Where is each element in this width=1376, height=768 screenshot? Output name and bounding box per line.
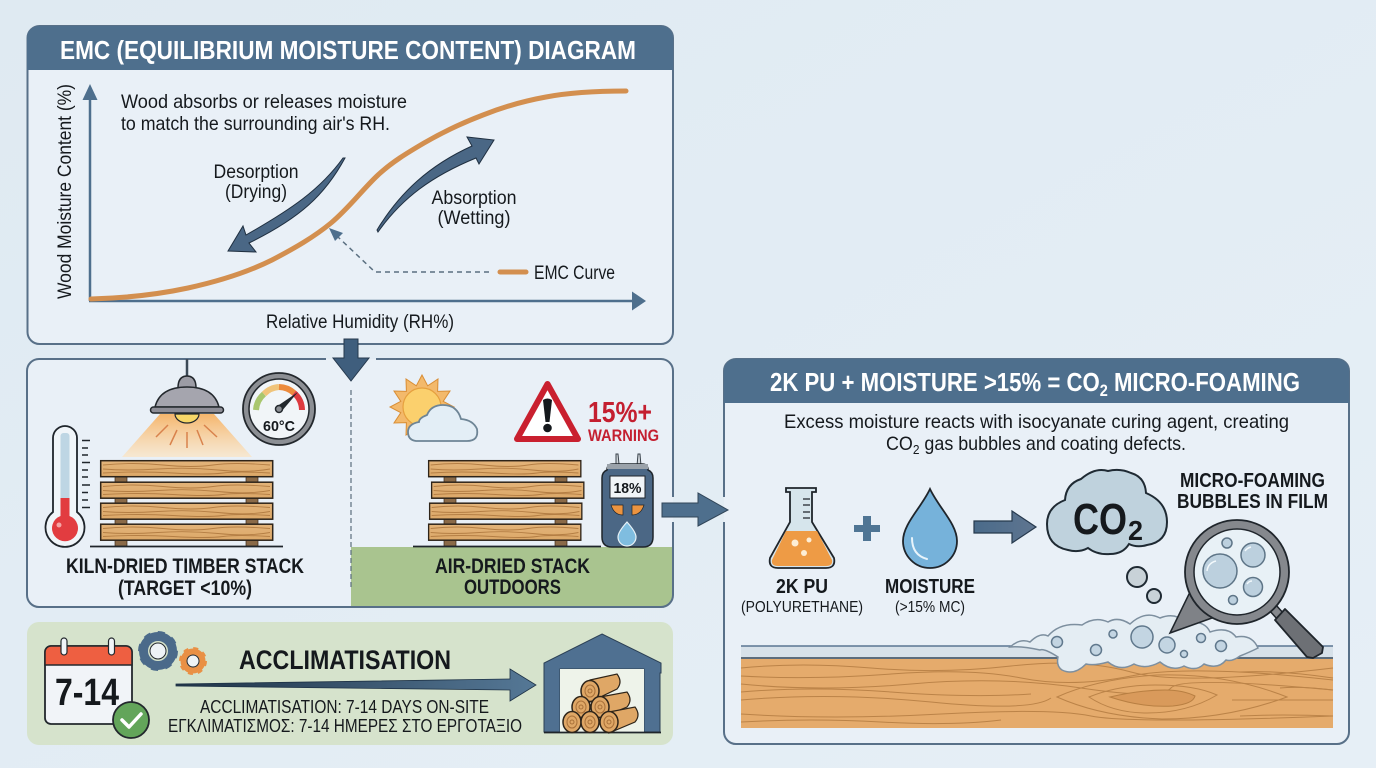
icon: heat lamp [122,359,252,457]
text: English duration: ACCLIMATISATION: 7-14 DAYS ON-SITE [200,697,489,717]
icon: water drop [903,489,957,568]
icon: CO2 cloud [1047,470,1167,554]
heading: micro-foaming title [724,359,1349,403]
label: x axis: Relative Humidity (RH%) [266,312,454,333]
icon: calendar [45,638,132,724]
panel: EMC diagram [27,26,673,344]
heading: micro-foaming title: 2 [1100,381,1108,400]
text: Greek duration: ΕΓΚΛΙΜΑΤΙΣΜΟΣ: 7-14 ΗΜΕΡΕΣ ΣΤΟ ΕΡΓΟΤΑΞΙΟ [168,716,522,736]
heading: EMC diagram title [27,26,673,70]
label: moisture threshold: (>15% MC) [895,599,965,616]
panel: drying methods [27,359,673,607]
icon: flask [770,488,834,568]
heading: micro-foaming title: 2K PU + MOISTURE >15% = CO [770,367,1157,397]
arrow: absorption [377,137,494,232]
label: moisture: MOISTURE [885,576,975,598]
label: micro-foaming bubbles: MICRO-FOAMING [1180,470,1325,492]
icon: plus [854,516,880,541]
label: kiln-dried: KILN-DRIED TIMBER STACK [66,555,304,578]
arrow: acclimatisation timeline [176,669,536,701]
label: bubbles in film: BUBBLES IN FILM [1177,491,1328,513]
label: 2K PU: 2K PU [776,576,828,598]
chart: EMC axes and curve [82,84,646,310]
icon: gears [141,634,205,673]
icon: CO2 cloud: CO [1073,495,1127,544]
label: outdoors: OUTDOORS [464,576,561,599]
icon: check badge [113,702,149,738]
icon: temperature gauge: 60°C [263,418,295,435]
legend: EMC curve [500,263,615,284]
label: polyurethane: (POLYURETHANE) [741,599,863,616]
icon: temperature gauge [243,373,315,445]
label: desorption: Desorption [214,162,298,183]
heading: micro-foaming title: MICRO-FOAMING [1108,367,1300,397]
icon: warning triangle [517,384,578,439]
heading: EMC diagram title: EMC (EQUILIBRIUM MOISTURE CONTENT) DIAGRAM [60,35,636,65]
arrow: reaction arrow [974,511,1036,543]
legend: EMC curve: EMC Curve [534,263,615,284]
text: 15% warning: WARNING [588,426,659,445]
text: reaction description: Excess moisture reacts with isocyanate curing agent, creating [784,411,1289,433]
arrow: desorption [228,158,345,252]
arrow: dashed legend pointer [329,228,489,272]
icon: calendar: 7-14 [55,672,119,714]
label: y axis: Wood Moisture Content (%) [55,84,76,299]
icon: magnifying glass [1170,520,1323,658]
label: drying: (Drying) [225,182,287,203]
icon: CO2 cloud: 2 [1128,515,1143,546]
label: target: (TARGET <10%) [118,577,252,600]
text: 15% warning: 15%+ [588,397,652,429]
text: 15% warning [588,397,659,445]
icon: moisture meter [602,454,653,547]
text: reaction description line 2: 2 [913,442,919,457]
panel: micro-foaming [724,359,1349,744]
icon: moisture meter: 18% [614,480,642,497]
heading: acclimatisation: ACCLIMATISATION [239,645,451,675]
background: outdoor grass [351,547,673,607]
label: absorption: Absorption [432,188,516,209]
illustration: coated wood with foam [741,615,1333,728]
text: wood moisture explanation line 2: to match the surrounding air's RH. [121,113,390,135]
text: reaction description line 2: CO [886,433,915,455]
text: reaction description line 2: gas bubbles and coating defects. [919,433,1186,455]
icon: sun and cloud [390,375,477,441]
label: wetting: (Wetting) [438,208,510,229]
illustration: kiln-dried timber stack [90,461,283,546]
icon: thermometer [46,426,90,547]
icon: storage shed with logs [544,634,661,733]
panel: acclimatisation [27,622,673,745]
icon: thought bubbles [1127,567,1161,603]
illustration: air-dried stack [413,461,601,546]
label: air-dried: AIR-DRIED STACK [435,555,590,578]
arrow: drying to foaming [662,493,728,526]
arrow: EMC to drying methods [333,339,369,381]
text: wood moisture explanation: Wood absorbs or releases moisture [121,91,407,113]
